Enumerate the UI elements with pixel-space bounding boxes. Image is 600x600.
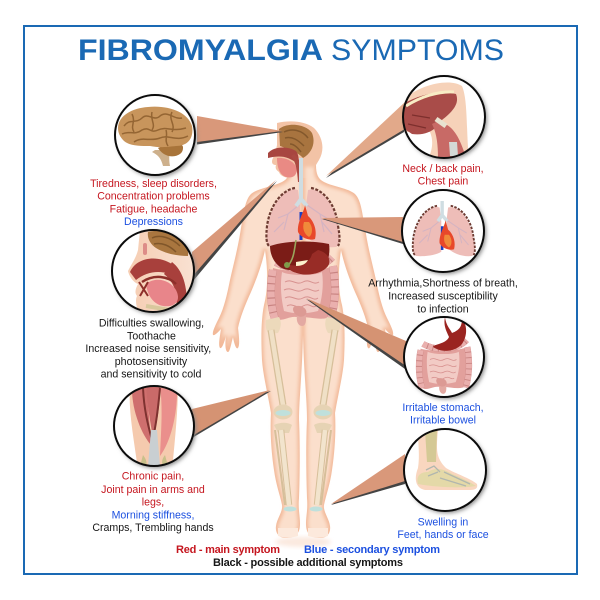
text: throat symptoms: Difficulties swallowing, [99, 318, 204, 330]
icon: leg muscles [130, 385, 178, 470]
text: neck symptoms [402, 163, 484, 188]
panel: shoulder circle [403, 76, 487, 160]
liver and stomach [270, 240, 329, 274]
text: neck symptoms: Chest pain [418, 176, 468, 188]
icon: head cross-section [128, 231, 193, 311]
icon: stomach and intestines [419, 317, 469, 394]
text: bowel symptoms: Irritable stomach, [402, 402, 484, 414]
title: SYMPTOMS [331, 34, 504, 67]
panel: foot circle [404, 429, 488, 513]
text: throat symptoms: Increased noise sensitivity, [85, 343, 211, 355]
text: leg symptoms: Morning stiffness, [112, 509, 194, 521]
title [78, 34, 504, 67]
text: swelling symptoms: Feet, hands or face [397, 529, 489, 541]
text: leg symptoms: Chronic pain, [122, 471, 184, 483]
icon: lungs and heart [412, 201, 476, 256]
text: brain symptoms: Fatigue, headache [110, 203, 197, 215]
text: bowel symptoms: Irritable bowel [410, 415, 476, 427]
title: FIBROMYALGIA [78, 34, 323, 67]
text: swelling symptoms [397, 516, 489, 541]
text: lungs symptoms [368, 277, 518, 315]
text: throat symptoms [85, 318, 211, 381]
right leg bones [308, 317, 340, 538]
panel: leg muscle circle [114, 385, 196, 470]
icon: shoulder muscles [403, 82, 469, 160]
pointer: brain [197, 116, 283, 144]
text: bowel symptoms [402, 402, 484, 427]
pointer: leg [192, 390, 271, 438]
feet shadow [275, 537, 331, 547]
panel: brain circle [115, 95, 197, 177]
text: swelling symptoms: Swelling in [418, 516, 468, 528]
left leg bones [266, 317, 298, 538]
text: lungs symptoms: Increased susceptibility [388, 291, 498, 303]
legend: Blue - secondary symptom [304, 544, 440, 556]
intestines [271, 257, 335, 326]
panel: intestines circle [404, 317, 486, 399]
text: brain symptoms: Depressions [124, 216, 183, 228]
head organs [268, 125, 314, 182]
text: throat symptoms: photosensitivity [115, 356, 188, 368]
text: leg symptoms: legs, [142, 497, 164, 509]
pointer: throat [191, 180, 277, 281]
pointer: intestines [306, 298, 406, 369]
body silhouette [213, 121, 393, 538]
panel: throat circle [112, 230, 200, 314]
human body anatomy figure [213, 121, 393, 547]
icon: brain [118, 107, 192, 166]
text: brain symptoms [90, 178, 217, 228]
pointer: shoulder [326, 102, 405, 178]
text: leg symptoms: Cramps, Trembling hands [92, 522, 214, 534]
lungs and heart [266, 158, 340, 247]
icon: foot bones [416, 430, 477, 490]
text: neck symptoms: Neck / back pain, [402, 163, 484, 175]
text: leg symptoms: Joint pain in arms and [101, 484, 205, 496]
legend: Red - main symptom [176, 544, 280, 556]
pointer: foot [331, 454, 405, 505]
text: brain symptoms: Tiredness, sleep disorders, [90, 178, 217, 190]
pointer: lungs [321, 217, 403, 244]
text: brain symptoms: Concentration problems [97, 191, 210, 203]
text: throat symptoms: Toothache [127, 330, 176, 342]
text: throat symptoms: and sensitivity to cold [101, 369, 201, 381]
legend [176, 544, 440, 569]
text: leg symptoms [92, 471, 214, 534]
text: lungs symptoms: Arrhythmia,Shortness of breath, [368, 277, 518, 289]
legend: Black - possible additional symptoms [213, 557, 403, 569]
text: lungs symptoms: to infection [417, 303, 469, 315]
panel: lungs circle [400, 180, 490, 274]
